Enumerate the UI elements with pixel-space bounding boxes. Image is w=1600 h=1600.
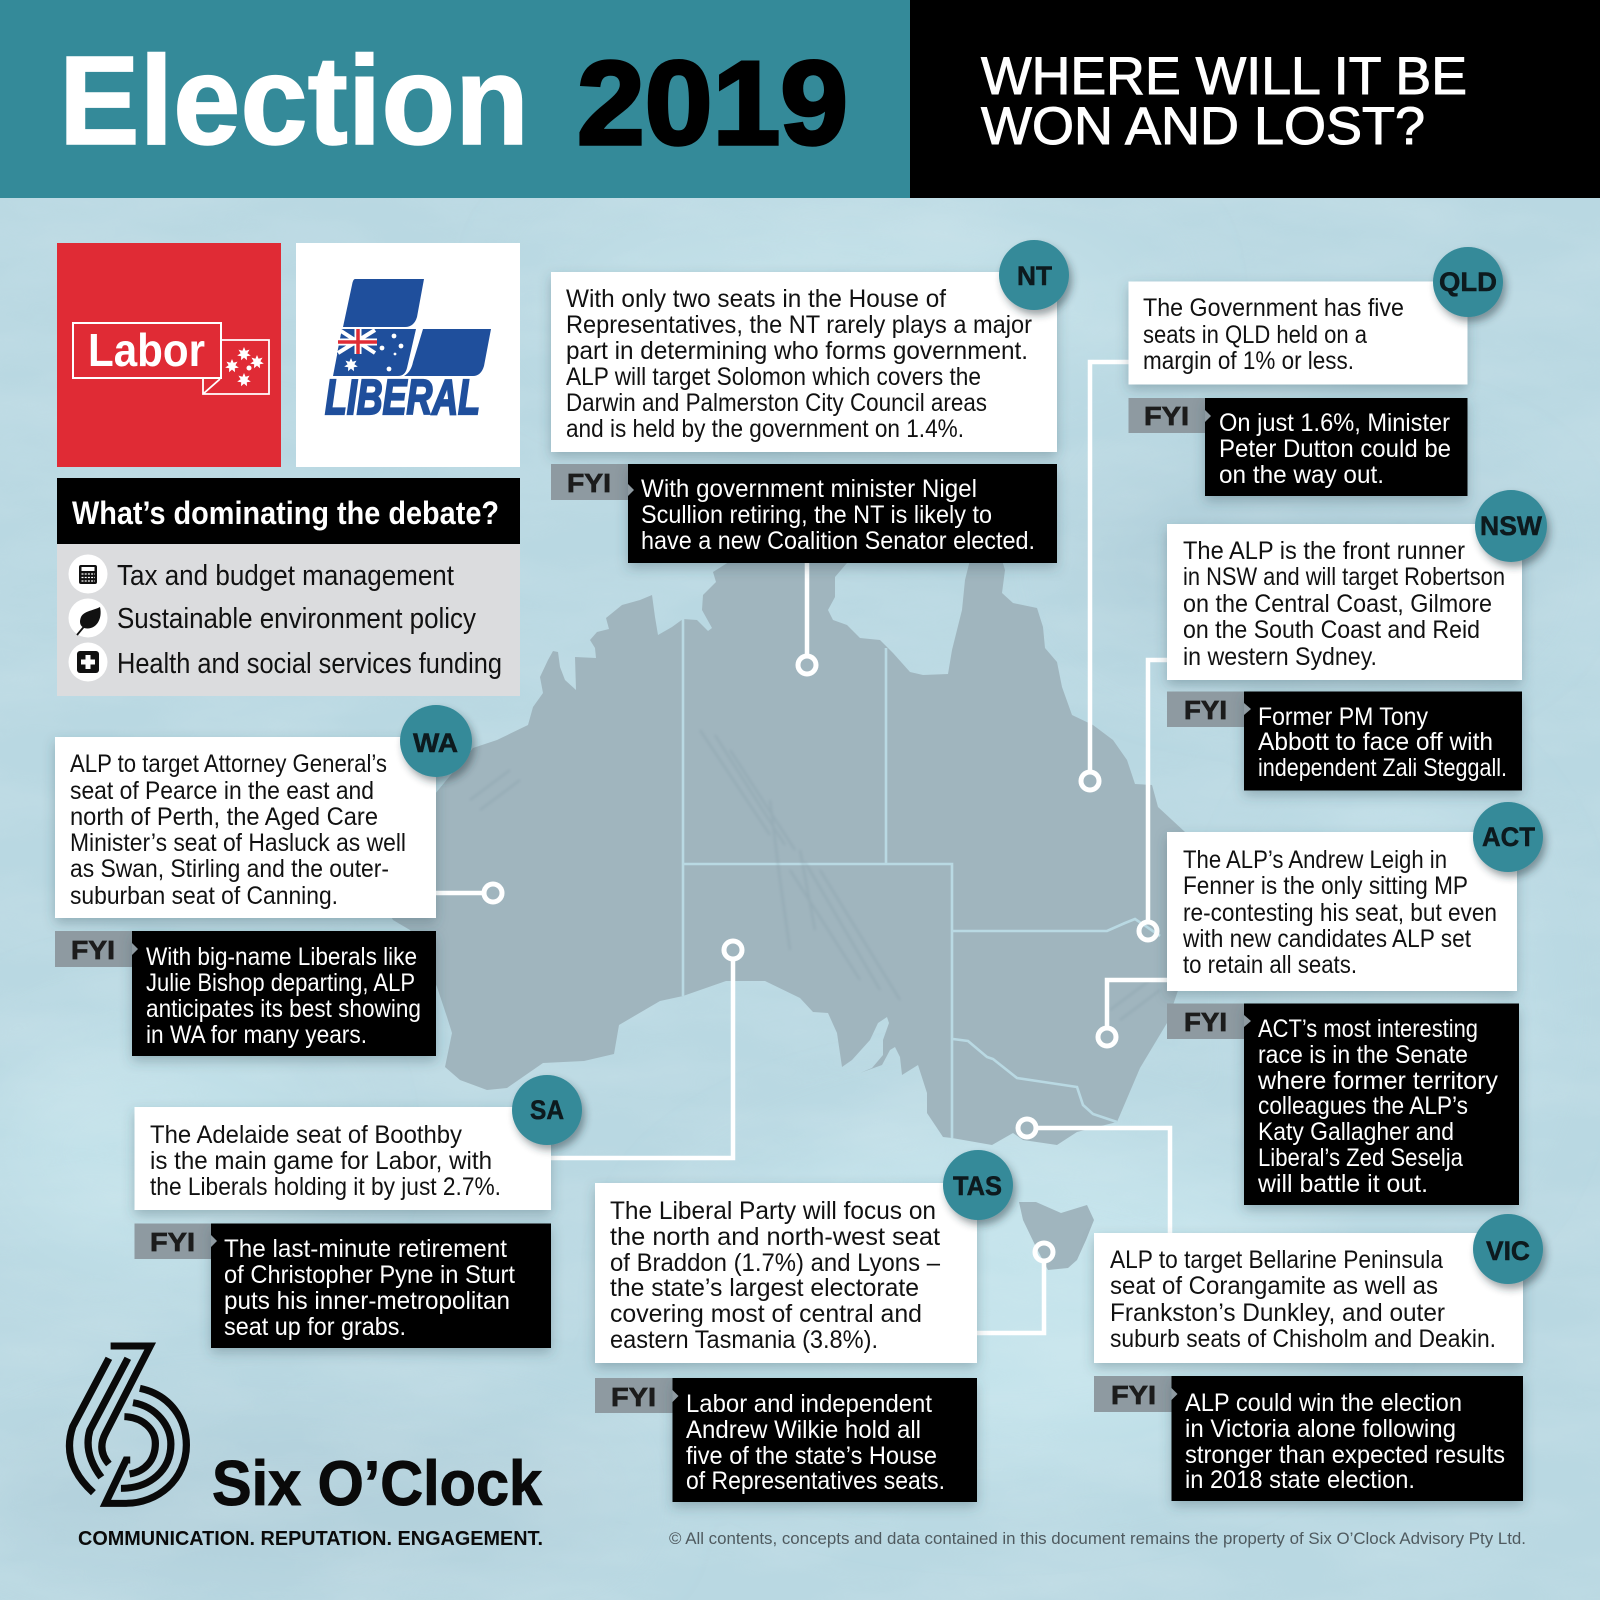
WA FYI: FYI (71, 935, 115, 965)
NT text: and is held by the government on 1.4%. (566, 415, 964, 443)
NT text: part in determining who forms government. (566, 337, 1028, 365)
NT text: Darwin and Palmerston City Council areas (566, 389, 987, 417)
WA text: Minister’s seat of Hasluck as well (70, 829, 406, 857)
connector: SA (551, 941, 742, 1158)
QLD FYI: On just 1.6%, Minister (1219, 409, 1450, 437)
ACT text: Fenner is the only sitting MP (1183, 872, 1468, 900)
NSW FYI: Abbott to face off with (1258, 728, 1493, 756)
mainland (385, 560, 1200, 1145)
QLD badge: QLD (1439, 267, 1497, 297)
WA FYI: in WA for many years. (146, 1021, 367, 1049)
ACT FYI: where former territory (1257, 1067, 1498, 1095)
connector: WA (436, 884, 502, 902)
logo: Six O'Clock: Six O’Clock (212, 1449, 543, 1519)
panel: TAS (595, 1150, 1013, 1502)
Tasmania (1019, 1202, 1094, 1270)
TAS FYI: FYI (611, 1382, 656, 1412)
NT text: ALP will target Solomon which covers the (566, 363, 981, 391)
map of Australia (385, 560, 1200, 1270)
header banner (0, 0, 1600, 198)
QLD FYI: on the way out. (1219, 461, 1384, 489)
title: 2019 (577, 37, 848, 170)
VIC FYI: in Victoria alone following (1185, 1415, 1456, 1443)
logo: Labor (57, 243, 281, 467)
VIC badge: VIC (1486, 1236, 1530, 1266)
ACT badge: ACT (1482, 822, 1535, 852)
connector: NT (798, 563, 816, 674)
TAS text: of Braddon (1.7%) and Lyons – (610, 1249, 940, 1277)
NSW FYI: FYI (1184, 695, 1227, 725)
TAS FYI (595, 1378, 977, 1502)
NT FYI: FYI (567, 468, 611, 498)
TAS FYI: of Representatives seats. (686, 1467, 945, 1495)
TAS badge (943, 1150, 1013, 1220)
QLD text: seats in QLD held on a (1143, 321, 1367, 349)
WA text: as Swan, Stirling and the outer- (70, 855, 389, 883)
QLD FYI: Peter Dutton could be (1219, 435, 1451, 463)
panel: SA (134, 1075, 582, 1348)
VIC text: ALP to target Bellarine Peninsula (1110, 1246, 1443, 1274)
WA text (70, 750, 406, 910)
NT badge (999, 240, 1069, 310)
NSW text: The ALP is the front runner (1183, 537, 1465, 565)
panel: NSW (1167, 490, 1547, 790)
NT text: Representatives, the NT rarely plays a major (566, 311, 1032, 339)
ACT text (1182, 846, 1497, 979)
panel: QLD (1128, 247, 1503, 496)
logo: Liberal (296, 243, 520, 467)
connector: TAS (977, 1243, 1053, 1333)
TAS text (610, 1197, 940, 1354)
subtitle (981, 47, 1467, 156)
SA text (150, 1121, 501, 1201)
ACT FYI: ACT’s most interesting (1258, 1015, 1478, 1043)
WA text: suburban seat of Canning. (70, 882, 338, 910)
subtitle: WON AND LOST? (981, 97, 1425, 156)
WA FYI (55, 931, 436, 1056)
item: environment (68, 598, 476, 638)
union jack (337, 329, 377, 354)
VIC text: Frankston’s Dunkley, and outer (1110, 1299, 1445, 1327)
QLD text: margin of 1% or less. (1143, 347, 1354, 375)
NSW text: on the South Coast and Reid (1183, 616, 1480, 644)
SA badge (512, 1075, 582, 1145)
WA text: north of Perth, the Aged Care (70, 803, 378, 831)
ACT text: re-contesting his seat, but even (1183, 899, 1497, 927)
SA FYI: FYI (150, 1227, 195, 1257)
QLD FYI: FYI (1144, 401, 1189, 431)
ACT FYI: Liberal’s Zed Seselja (1258, 1144, 1463, 1172)
NSW text: in NSW and will target Robertson (1183, 563, 1505, 591)
SA FYI (134, 1224, 551, 1348)
QLD badge (1433, 247, 1503, 317)
NT badge: NT (1017, 261, 1052, 291)
panel: ACT (1167, 802, 1543, 1205)
QLD text (1143, 294, 1404, 375)
ACT FYI (1167, 1004, 1519, 1205)
item: tax and budget: Tax and budget management (117, 560, 454, 592)
logo: Labor: Labor (88, 324, 205, 376)
TAS text: The Liberal Party will focus on (610, 1197, 936, 1225)
VIC FYI: in 2018 state election. (1185, 1466, 1415, 1494)
NT text (566, 285, 1032, 443)
TAS text: covering most of central and (610, 1300, 922, 1328)
panel: VIC (1094, 1214, 1543, 1501)
item: health (68, 642, 502, 682)
NT text: With only two seats in the House of (566, 285, 946, 313)
item: tax and budget (68, 554, 454, 594)
title: Election (59, 30, 529, 171)
title (59, 30, 848, 171)
VIC text: suburb seats of Chisholm and Deakin. (1110, 1325, 1496, 1353)
NSW text: on the Central Coast, Gilmore (1183, 590, 1492, 618)
NSW text: in western Sydney. (1183, 643, 1377, 671)
WA FYI: anticipates its best showing (146, 995, 421, 1023)
NSW badge: NSW (1480, 511, 1542, 541)
connector: VIC (1018, 1119, 1170, 1233)
TAS badge: TAS (953, 1171, 1002, 1201)
VIC FYI (1094, 1376, 1523, 1501)
NSW text (1183, 537, 1505, 671)
VIC FYI: FYI (1111, 1380, 1156, 1410)
copyright note: © All contents, concepts and data contained in this document remains the property of Six O’Clock Advisory Pty Ltd. (669, 1530, 1526, 1548)
panel: NT (551, 240, 1069, 563)
panel: WA (55, 705, 472, 1056)
ACT text: with new candidates ALP set (1182, 925, 1471, 953)
VIC FYI: ALP could win the election (1185, 1389, 1462, 1417)
SA FYI: puts his inner-metropolitan (224, 1287, 510, 1315)
TAS FYI: Labor and independent (686, 1390, 932, 1418)
TAS text: the state’s largest electorate (610, 1274, 919, 1302)
ACT badge (1473, 802, 1543, 872)
WA FYI: With big-name Liberals like (146, 943, 417, 971)
item: health: Health and social services funding (117, 648, 502, 680)
heading: What’s dominating the debate? (72, 495, 499, 531)
WA badge (400, 705, 472, 777)
item: environment: Sustainable environment policy (117, 603, 476, 635)
WA text: ALP to target Attorney General’s (70, 750, 387, 778)
SA text: The Adelaide seat of Boothby (150, 1121, 462, 1149)
logo: Liberal: LIBERAL (325, 371, 480, 425)
logo: Six O'Clock (69, 1346, 543, 1550)
SA FYI: The last-minute retirement (224, 1235, 507, 1263)
NT FYI: have a new Coalition Senator elected. (641, 527, 1035, 555)
central relief streaks (470, 730, 1160, 1020)
NSW FYI (1167, 692, 1522, 790)
TAS text: eastern Tasmania (3.8%). (610, 1326, 878, 1354)
ACT FYI: race is in the Senate (1258, 1041, 1468, 1069)
WA badge: WA (413, 728, 458, 758)
QLD FYI (1128, 398, 1468, 496)
VIC FYI: stronger than expected results (1185, 1441, 1505, 1469)
subtitle: WHERE WILL IT BE (981, 47, 1467, 106)
VIC text: seat of Corangamite as well as (1110, 1272, 1438, 1300)
QLD text: The Government has five (1143, 294, 1404, 322)
ACT text: The ALP’s Andrew Leigh in (1183, 846, 1447, 874)
TAS FYI: Andrew Wilkie hold all (686, 1416, 921, 1444)
NT FYI (551, 464, 1057, 563)
connector: QLD (1081, 362, 1129, 790)
SA FYI: seat up for grabs. (224, 1313, 406, 1341)
VIC badge (1473, 1214, 1543, 1284)
state borders (683, 619, 1160, 1138)
NSW FYI: Former PM Tony (1258, 703, 1428, 731)
TAS FYI: five of the state’s House (686, 1442, 937, 1470)
TAS text: the north and north-west seat (610, 1223, 940, 1251)
logo: Six O'Clock: COMMUNICATION. REPUTATION. ENGAGEMENT. (78, 1528, 543, 1550)
connector: NSW (1139, 660, 1167, 940)
ACT text: to retain all seats. (1183, 951, 1357, 979)
WA FYI: Julie Bishop departing, ALP (146, 969, 415, 997)
NSW badge (1475, 490, 1547, 562)
SA FYI: of Christopher Pyne in Sturt (224, 1261, 515, 1289)
panel: what's dominating the debate (57, 478, 520, 696)
NT FYI: Scullion retiring, the NT is likely to (641, 501, 992, 529)
SA text: the Liberals holding it by just 2.7%. (150, 1173, 501, 1201)
SA text: is the main game for Labor, with (150, 1147, 492, 1175)
ACT FYI: colleagues the ALP’s (1258, 1092, 1468, 1120)
NT FYI: With government minister Nigel (641, 475, 977, 503)
icon: stylised six (69, 1346, 186, 1503)
SA badge: SA (530, 1095, 564, 1125)
connector: ACT (1098, 980, 1167, 1046)
VIC text (1110, 1246, 1496, 1353)
NSW FYI: independent Zali Steggall. (1258, 754, 1507, 782)
ACT FYI: FYI (1184, 1007, 1227, 1037)
ACT FYI: will battle it out. (1257, 1170, 1428, 1198)
ACT FYI: Katy Gallagher and (1258, 1118, 1454, 1146)
WA text: seat of Pearce in the east and (70, 777, 374, 805)
